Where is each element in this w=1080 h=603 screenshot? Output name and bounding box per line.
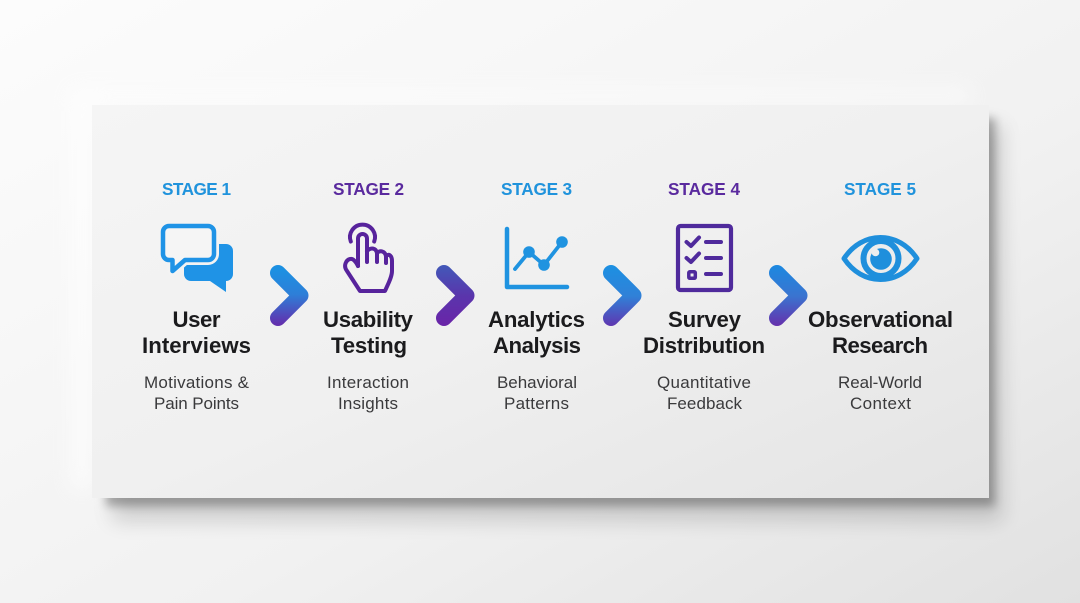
title: Usability Testing: Usability [323,307,414,332]
title: Analytics Analysis: Analysis [493,333,581,358]
arrow 4 [777,273,800,318]
title: Observational Research: Research [832,333,928,358]
description: Feedback [667,394,742,413]
description: Motivations & [144,373,250,392]
description: Real-World [838,373,922,392]
stage 3 label: STAGE 3 [501,179,572,199]
stage 5 label: STAGE 5 [844,179,916,199]
stage 5 column [808,179,953,413]
icon: tapping hand [345,225,392,291]
description: Interaction [327,373,409,392]
icon: survey checklist [678,226,731,290]
description: Pain Points [154,394,239,413]
title: Analytics Analysis: Analytics [488,307,585,332]
description: Context [850,394,911,413]
icon: chat bubbles [163,226,233,292]
description: Patterns [504,394,569,413]
stage 2 label: STAGE 2 [333,179,404,199]
icon: line chart [507,229,568,287]
stage 1 column [142,179,251,413]
arrow 3 [611,273,634,318]
arrow 2 [444,273,466,318]
stage 4 label: STAGE 4 [668,179,740,199]
title: Survey Distribution: Distribution [643,333,765,358]
stage 1 label: STAGE 1 [162,179,231,199]
panel: main card [92,105,989,498]
stage 4 column [643,179,765,413]
stage 2 column [323,179,414,413]
description: Behavioral [497,373,577,392]
soft glow around card [72,90,970,490]
title: Survey Distribution: Survey [668,307,742,332]
title: Usability Testing: Testing [331,333,407,358]
title: User Interviews: Interviews [142,333,251,358]
card shadow [106,118,1002,521]
title: Observational Research: Observational [808,307,953,332]
arrow 1 [278,273,300,318]
title: User Interviews: User [172,307,221,332]
description: Quantitative [657,373,751,392]
description: Insights [338,394,398,413]
stage 3 column [488,179,585,413]
icon: eye [844,238,917,280]
